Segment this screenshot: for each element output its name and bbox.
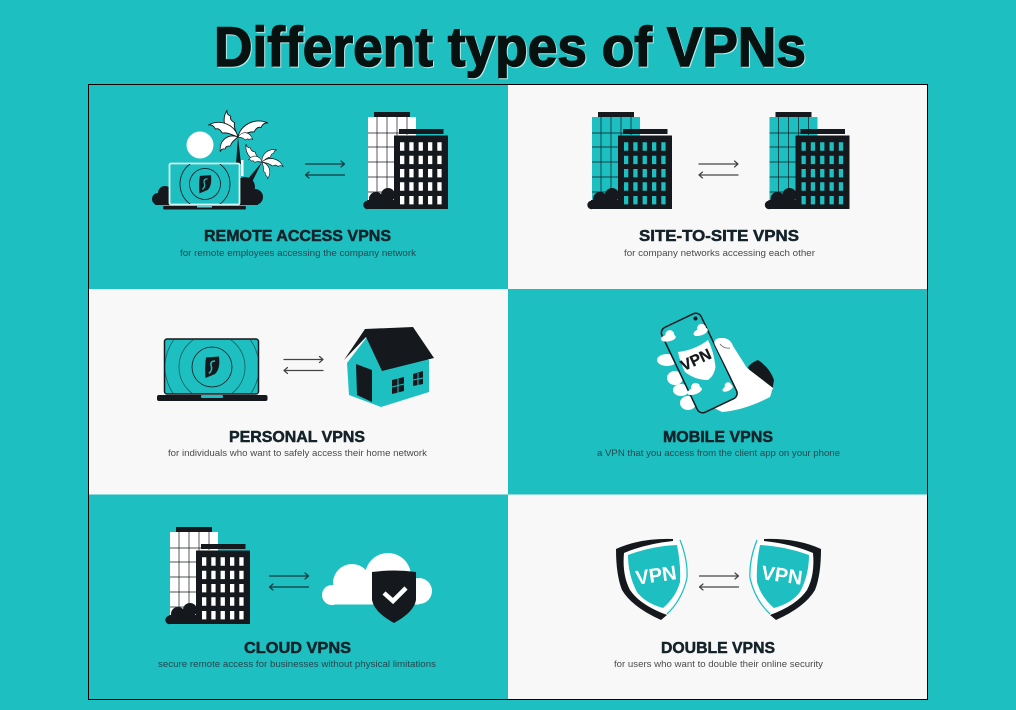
- heading: remote access VPNs: REMOTE ACCESS VPNS: [204, 228, 391, 245]
- heading: double VPNs: DOUBLE VPNS: [661, 640, 775, 657]
- description: site-to-site: for company networks accessing each other: [624, 248, 815, 258]
- icon: laptop: [157, 338, 268, 401]
- icon: left VPN shield: [616, 539, 687, 620]
- heading: site-to-site VPNs: SITE-TO-SITE VPNS: [639, 228, 799, 245]
- icon: palm trees, sun and laptop: [152, 109, 285, 210]
- icon: hand holding phone: VPN: [678, 346, 714, 375]
- heading: cloud VPNs: CLOUD VPNS: [244, 640, 351, 657]
- description: double: for users who want to double their online security: [614, 659, 824, 669]
- icon: office buildings: [165, 527, 250, 624]
- icon: hand holding phone: [657, 311, 774, 415]
- icon: cloud with shield: [322, 553, 432, 623]
- icon: left office buildings: [587, 112, 672, 209]
- panel: site-to-site VPNs: [508, 84, 928, 290]
- heading: mobile VPNs: MOBILE VPNS: [663, 429, 773, 446]
- panel: mobile VPNs: [508, 289, 928, 494]
- arrows: two-way connection: [270, 573, 308, 590]
- panel: personal VPNs: [88, 289, 508, 494]
- icon: right VPN shield: [750, 539, 821, 620]
- arrows: two-way connection: [284, 356, 323, 374]
- description: remote access: for remote employees accessing the company network: [180, 248, 417, 258]
- panel: double VPNs: [508, 494, 928, 700]
- arrows: two-way connection: [306, 161, 344, 178]
- title: Different types of VPNs: [214, 15, 806, 78]
- icon: left VPN shield: VPN: [634, 562, 678, 590]
- heading: personal VPNs: PERSONAL VPNS: [229, 429, 365, 446]
- description: mobile: a VPN that you access from the client app on your phone: [597, 448, 840, 458]
- icon: office buildings: [363, 112, 448, 209]
- panel: cloud VPNs: [88, 494, 508, 700]
- infographic: different types of VPNs: [88, 24, 928, 700]
- panel: remote access VPNs: [152, 110, 448, 258]
- arrows: two-way connection: [699, 161, 738, 178]
- icon: right office buildings: [765, 112, 850, 209]
- description: personal: for individuals who want to safely access their home network: [168, 448, 428, 458]
- description: cloud: secure remote access for businesses without physical limitations: [158, 659, 437, 669]
- icon: right VPN shield: VPN: [760, 562, 804, 590]
- arrows: two-way connection: [700, 573, 738, 590]
- icon: house: [344, 327, 434, 407]
